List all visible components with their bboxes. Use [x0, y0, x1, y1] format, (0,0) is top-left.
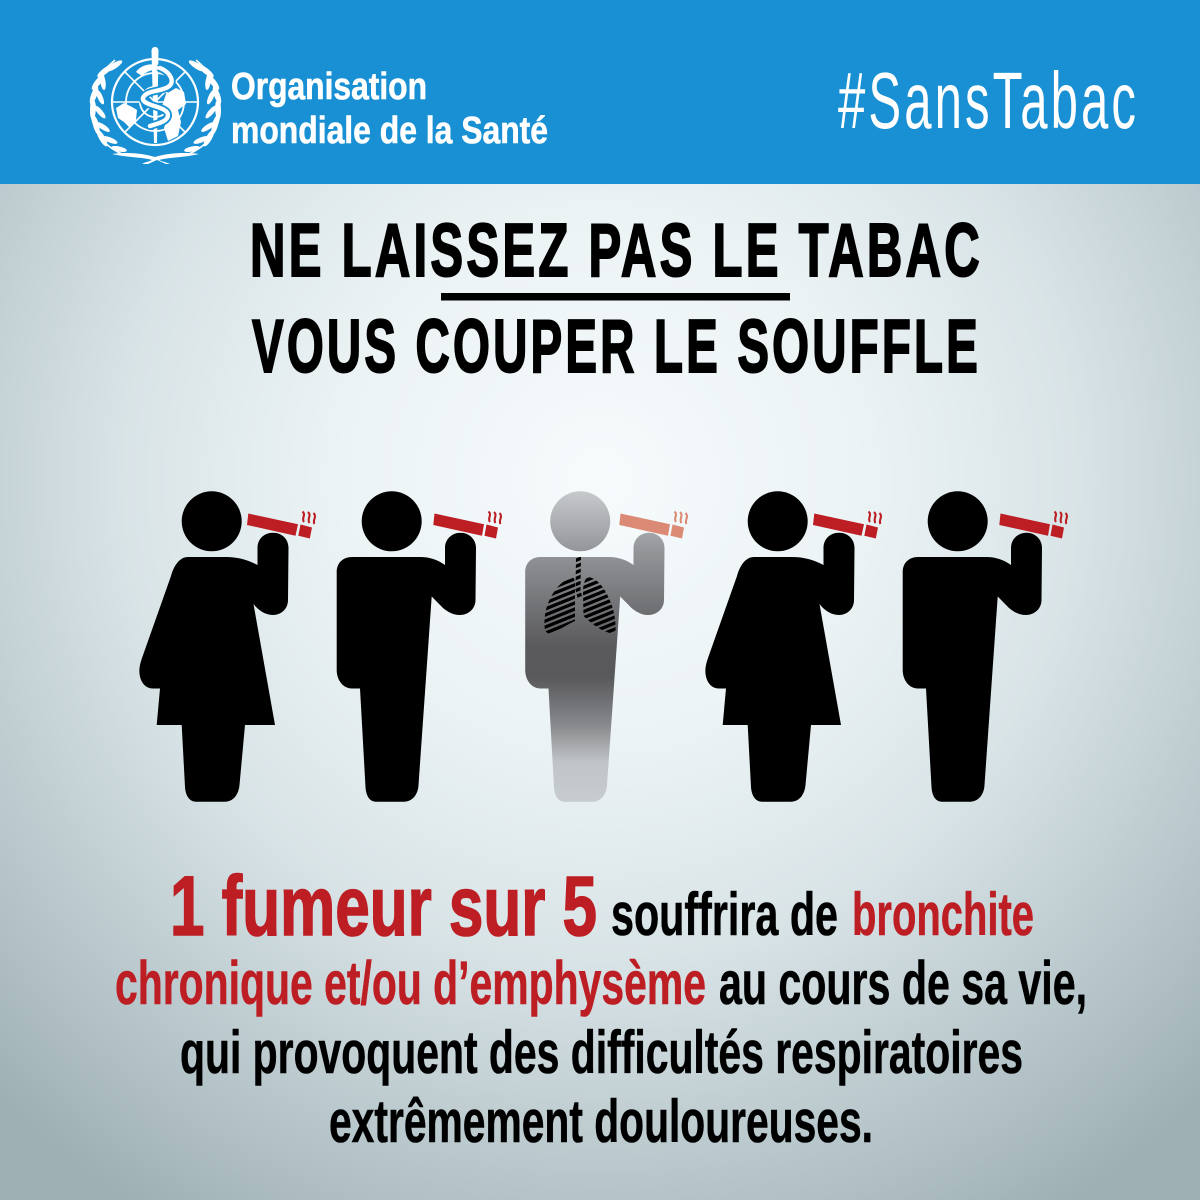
title [250, 208, 983, 388]
organisation name [231, 66, 548, 152]
statement text: extrêmement douloureuses. [329, 1088, 873, 1155]
figure 2: man smoking [337, 491, 501, 802]
figure 4: woman smoking [705, 491, 881, 802]
statement text: chronique et/ou d’emphysème [115, 949, 706, 1017]
figure 5: man smoking [903, 491, 1067, 802]
header band [0, 0, 1200, 184]
organisation name: mondiale de la Santé [231, 110, 548, 152]
statement text: souffrira de [611, 881, 838, 948]
figures row [139, 491, 1067, 802]
statement text [115, 859, 1087, 1155]
cigarette, faded [619, 512, 687, 538]
icon: lungs [544, 557, 616, 634]
statement text: bronchite [852, 881, 1034, 948]
figure 3: faded man with lungs [525, 491, 687, 802]
organisation name: Organisation [231, 66, 427, 108]
statement text: 1 fumeur sur 5 [170, 859, 597, 953]
icon: WHO emblem [88, 47, 223, 164]
figure 1: woman smoking [139, 491, 315, 802]
